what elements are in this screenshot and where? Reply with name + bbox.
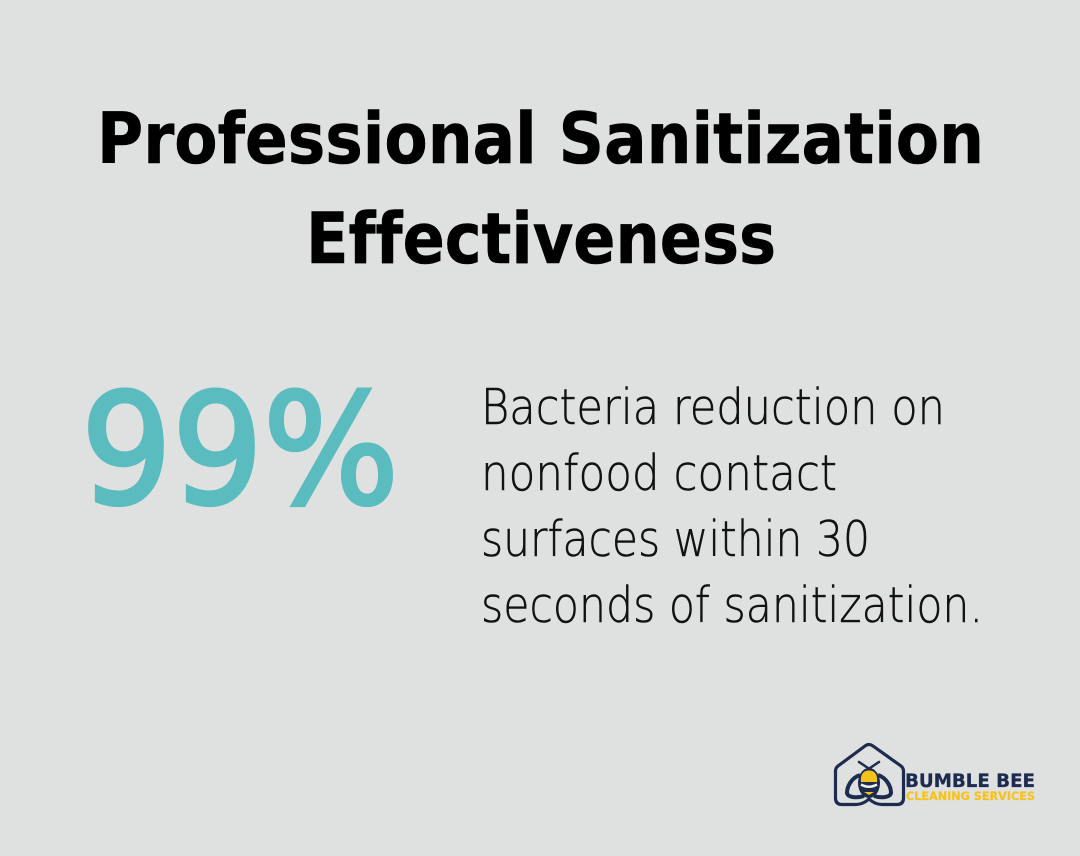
description text: Bacteria reduction on xyxy=(481,379,945,436)
title: Effectiveness xyxy=(306,198,776,280)
title: Professional Sanitization xyxy=(97,98,984,180)
statistic: 99%: 99% xyxy=(81,362,399,540)
description text: seconds of sanitization. xyxy=(481,577,983,634)
icon: house with bee xyxy=(836,744,904,804)
description text xyxy=(481,379,983,634)
logo tagline: CLEANING SERVICES xyxy=(906,789,1035,803)
logo: Bumble Bee Cleaning Services xyxy=(836,744,1035,804)
logo name: BUMBLE BEE xyxy=(905,770,1035,792)
description text: surfaces within 30 xyxy=(481,511,870,568)
title xyxy=(97,98,984,280)
description text: nonfood contact xyxy=(481,445,837,502)
